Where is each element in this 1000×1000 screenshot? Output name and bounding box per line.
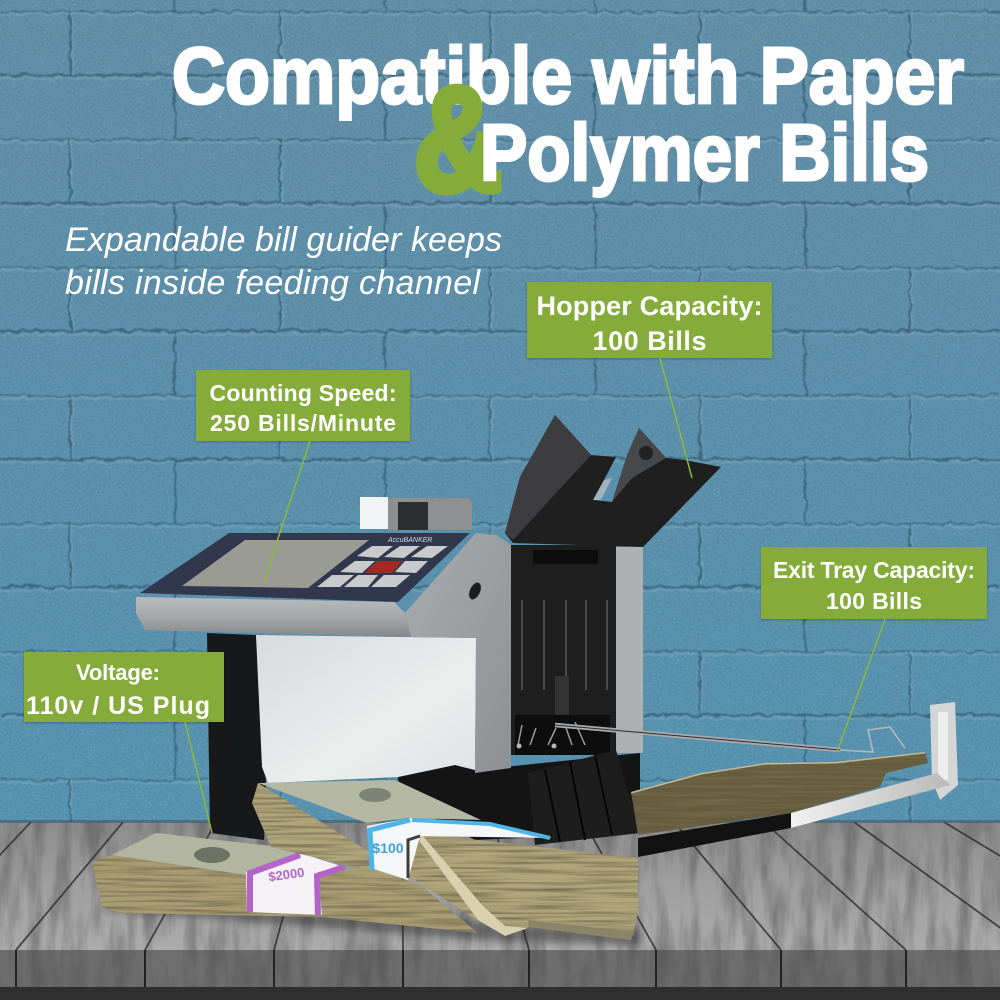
callout: counting speed	[196, 370, 410, 581]
callout: hopper capacity: 100 Bills	[592, 326, 706, 356]
machine control panel	[140, 533, 470, 602]
machine screen	[182, 540, 369, 588]
callout: counting speed: Counting Speed:	[210, 380, 396, 406]
machine logo: AccuBANKER	[387, 537, 432, 544]
callout: hopper capacity	[527, 282, 772, 478]
subtitle	[65, 221, 502, 302]
purple strap	[246, 853, 344, 915]
left $20 stack: $2000	[267, 865, 305, 884]
wooden table	[0, 820, 1000, 1000]
subtitle: bills inside feeding channel	[65, 264, 481, 302]
machine silver side	[405, 533, 511, 773]
tray rod	[555, 725, 840, 750]
left $20 stack	[85, 833, 485, 940]
bills in exit tray	[631, 752, 928, 835]
subtitle: Expandable bill guider keeps	[65, 221, 502, 259]
callout: voltage	[24, 652, 224, 833]
machine rear tray	[360, 497, 472, 530]
currency counter machine	[136, 415, 721, 845]
shadow under stacks	[100, 900, 640, 945]
tray upright bracket	[930, 702, 958, 800]
machine coin slot	[467, 581, 483, 601]
callout: exit tray capacity	[761, 547, 987, 752]
machine base	[207, 633, 640, 845]
callout: voltage: Voltage:	[76, 660, 160, 685]
callout: voltage: 110v / US Plug	[26, 692, 210, 720]
callout: exit tray capacity: 100 Bills	[826, 588, 922, 614]
machine keypad	[317, 546, 448, 587]
title	[172, 31, 964, 222]
tray floor	[791, 773, 950, 828]
callout: hopper capacity: Hopper Capacity:	[536, 291, 762, 321]
right $1 stack: $100	[372, 840, 404, 856]
machine white front panel	[256, 635, 476, 783]
callout: exit tray capacity: Exit Tray Capacity:	[773, 557, 975, 583]
machine back column	[511, 545, 643, 755]
machine hopper	[505, 415, 721, 547]
title line 2: Polymer Bills	[480, 108, 929, 197]
green ampersand: &	[414, 57, 502, 222]
exit tray	[555, 702, 958, 857]
callout: counting speed: 250 Bills/Minute	[210, 410, 396, 436]
blue strap	[367, 818, 552, 880]
cash stacks	[85, 775, 645, 945]
machine silver front lip	[136, 597, 411, 637]
right $1 stack	[245, 775, 645, 945]
